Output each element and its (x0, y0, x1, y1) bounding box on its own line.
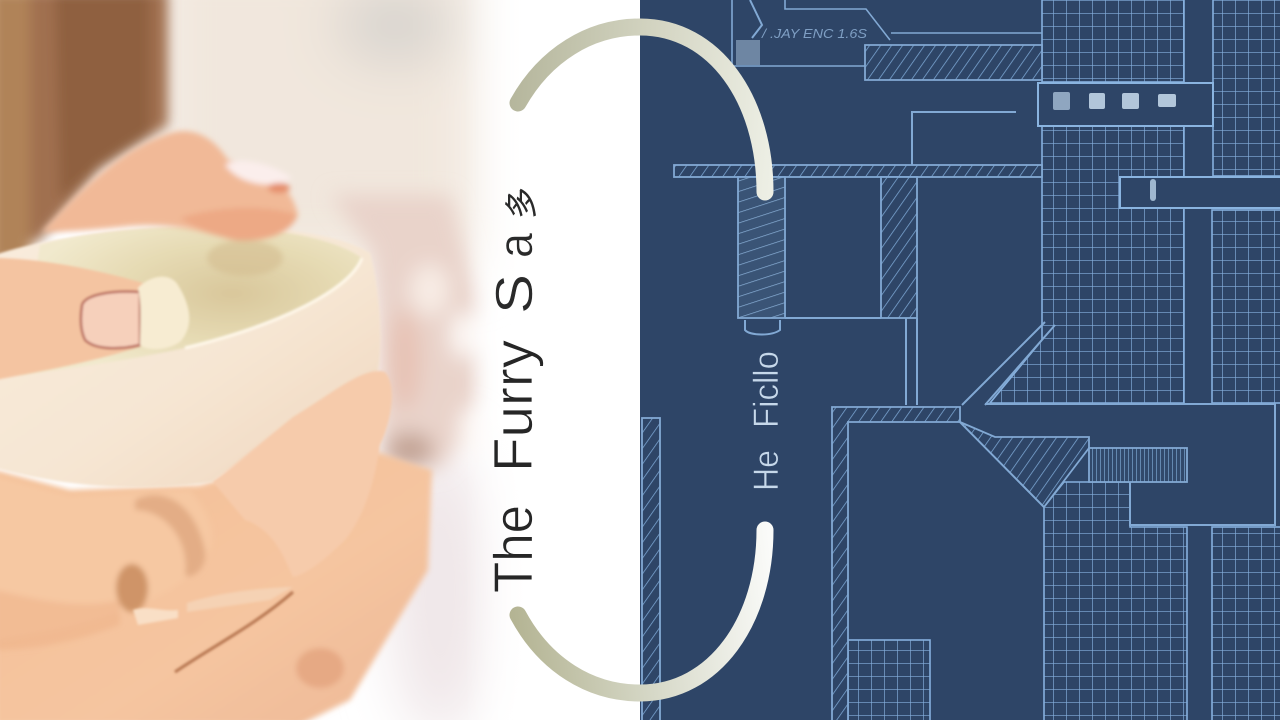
thumb over the cup rim (0, 258, 189, 380)
decorative top arc (518, 27, 765, 192)
floor plan walls (745, 112, 1275, 525)
panel: photo of hands holding a cup (0, 0, 640, 720)
blurred fingers behind the cup, right side (330, 195, 485, 470)
title: vertical text: Furry (482, 339, 544, 472)
top-left drawing details (732, 0, 1042, 66)
brown hair (0, 0, 168, 262)
title: vertical text (482, 187, 544, 593)
right thumb and lower fingers (213, 371, 392, 577)
upper finger (42, 131, 298, 276)
panel: blueprint (640, 0, 1280, 720)
white fade into the text band (465, 0, 530, 720)
blurred cream backdrop (150, 0, 490, 720)
small blueprint annotation: / .JAY ENC 1.6S (761, 26, 867, 41)
cup interior (20, 227, 362, 375)
hatched wall sections (642, 45, 1187, 720)
left fingers with knuckle (0, 475, 212, 650)
horizontal bar at right (1120, 177, 1280, 208)
title: vertical text: 多 (503, 187, 540, 219)
blueprint vertical label: Ficllo (747, 351, 786, 428)
band with small windows (1038, 83, 1213, 126)
decorative bottom arc (518, 530, 765, 693)
blueprint vertical label (747, 351, 786, 491)
lower hand (0, 440, 432, 720)
title: vertical text: The (482, 505, 544, 593)
nail and hand highlights (133, 587, 293, 672)
title: vertical text: a (490, 233, 543, 258)
title: vertical text: S (486, 274, 544, 314)
blueprint vertical label: He (747, 450, 786, 491)
grid blocks (848, 0, 1280, 720)
cup body (0, 226, 380, 487)
